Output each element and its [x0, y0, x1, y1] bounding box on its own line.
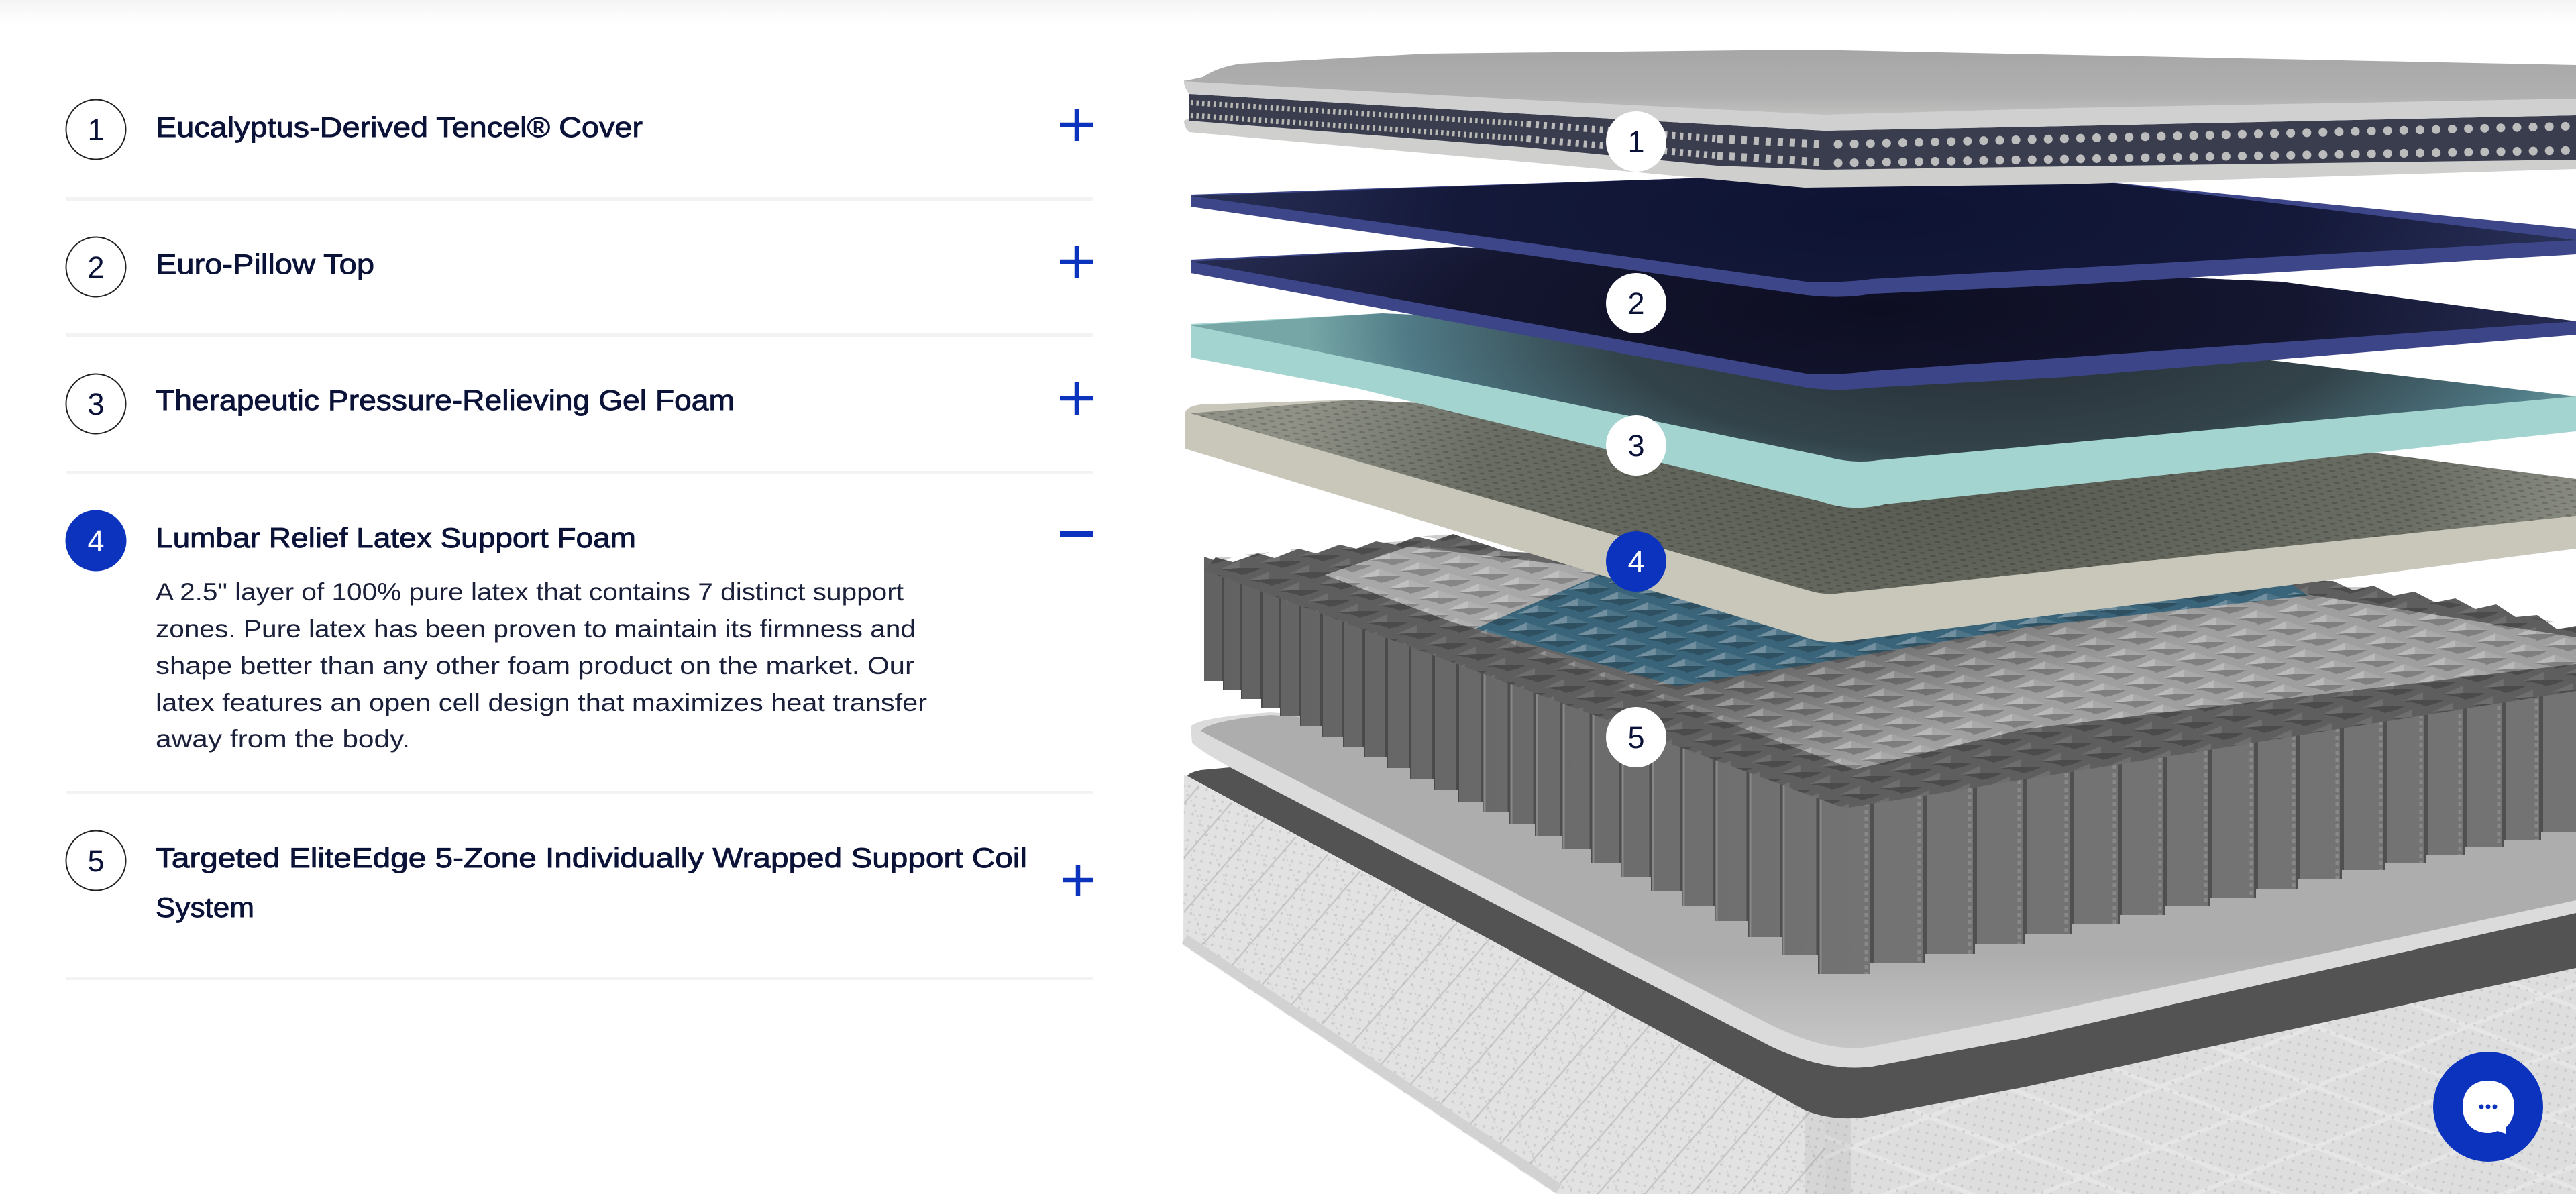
item 4: Lumbar Relief Latex Support Foam (expanded): shape better than any other foam product on the market. Our — [156, 652, 914, 680]
item 3: Therapeutic Pressure-Relieving Gel Foam: Therapeutic Pressure-Relieving Gel Foam — [156, 384, 735, 416]
layer 5: wrapped support coils — [1204, 534, 2576, 1006]
item 2: Euro-Pillow Top — [66, 237, 1093, 296]
top page shadow band — [0, 0, 2576, 24]
marker badge 1: 1 — [1627, 125, 1645, 159]
layer 3: gel foam — [1191, 313, 2576, 508]
marker badge 3: 3 — [1627, 429, 1645, 463]
item 4: Lumbar Relief Latex Support Foam (expanded): 4 — [87, 524, 105, 558]
layer 2: lower pillow foam — [1191, 247, 2576, 390]
item 3: Therapeutic Pressure-Relieving Gel Foam — [66, 374, 1093, 433]
item 4: Lumbar Relief Latex Support Foam (expanded): zones. Pure latex has been proven to maintain its firmness and — [156, 615, 916, 643]
comfort base foam slab — [1191, 712, 2576, 1067]
item 3: Therapeutic Pressure-Relieving Gel Foam: 3 — [87, 387, 105, 421]
marker badge 5 — [1606, 707, 1666, 767]
marker badge 5: 5 — [1627, 720, 1645, 755]
layer 1: tencel cover pillow top — [1184, 50, 2576, 188]
item 4: Lumbar Relief Latex Support Foam (expanded): A 2.5" layer of 100% pure latex that contains 7 distinct support — [156, 578, 904, 606]
marker badge 4 (active): 4 — [1627, 545, 1645, 579]
marker badge 1 — [1606, 111, 1666, 172]
item 4: Lumbar Relief Latex Support Foam (expanded) — [66, 510, 1093, 753]
item 2: Euro-Pillow Top: 2 — [87, 250, 105, 284]
item 4: Lumbar Relief Latex Support Foam (expanded): latex features an open cell design that maximizes heat transfer — [156, 689, 927, 716]
marker badge 2 — [1606, 273, 1666, 333]
layer 4: latex support foam — [1185, 400, 2576, 642]
item 4: Lumbar Relief Latex Support Foam (expanded): Lumbar Relief Latex Support Foam — [156, 522, 636, 553]
item 1: Eucalyptus-Derived Tencel Cover: 1 — [87, 113, 105, 147]
marker badge 3 — [1606, 415, 1666, 476]
item 5: Targeted EliteEdge 5-Zone Individually Wrapped Support Coil System: System — [156, 891, 254, 923]
marker badge 2: 2 — [1627, 286, 1645, 321]
chat button — [2433, 1052, 2543, 1162]
layer 2: upper pillow foam — [1191, 178, 2576, 297]
panel: layer accordion list — [66, 99, 1093, 980]
mattress base with quilted sides — [1183, 767, 2576, 1194]
item 5: Targeted EliteEdge 5-Zone Individually Wrapped Support Coil System: 5 — [87, 844, 105, 878]
item 5: Targeted EliteEdge 5-Zone Individually Wrapped Support Coil System — [66, 830, 1093, 923]
item 5: Targeted EliteEdge 5-Zone Individually Wrapped Support Coil System: Targeted EliteEdge 5-Zone Individually Wrapped Support Coil — [156, 842, 1027, 873]
item 1: Eucalyptus-Derived Tencel Cover: Eucalyptus-Derived Tencel® Cover — [156, 111, 643, 143]
marker badge 4 (active) — [1606, 531, 1666, 592]
item 1: Eucalyptus-Derived Tencel Cover — [66, 99, 1093, 160]
item 2: Euro-Pillow Top: Euro-Pillow Top — [156, 248, 374, 280]
illustration: exploded mattress layers — [1183, 50, 2576, 1194]
item 4: Lumbar Relief Latex Support Foam (expanded): away from the body. — [156, 725, 410, 753]
